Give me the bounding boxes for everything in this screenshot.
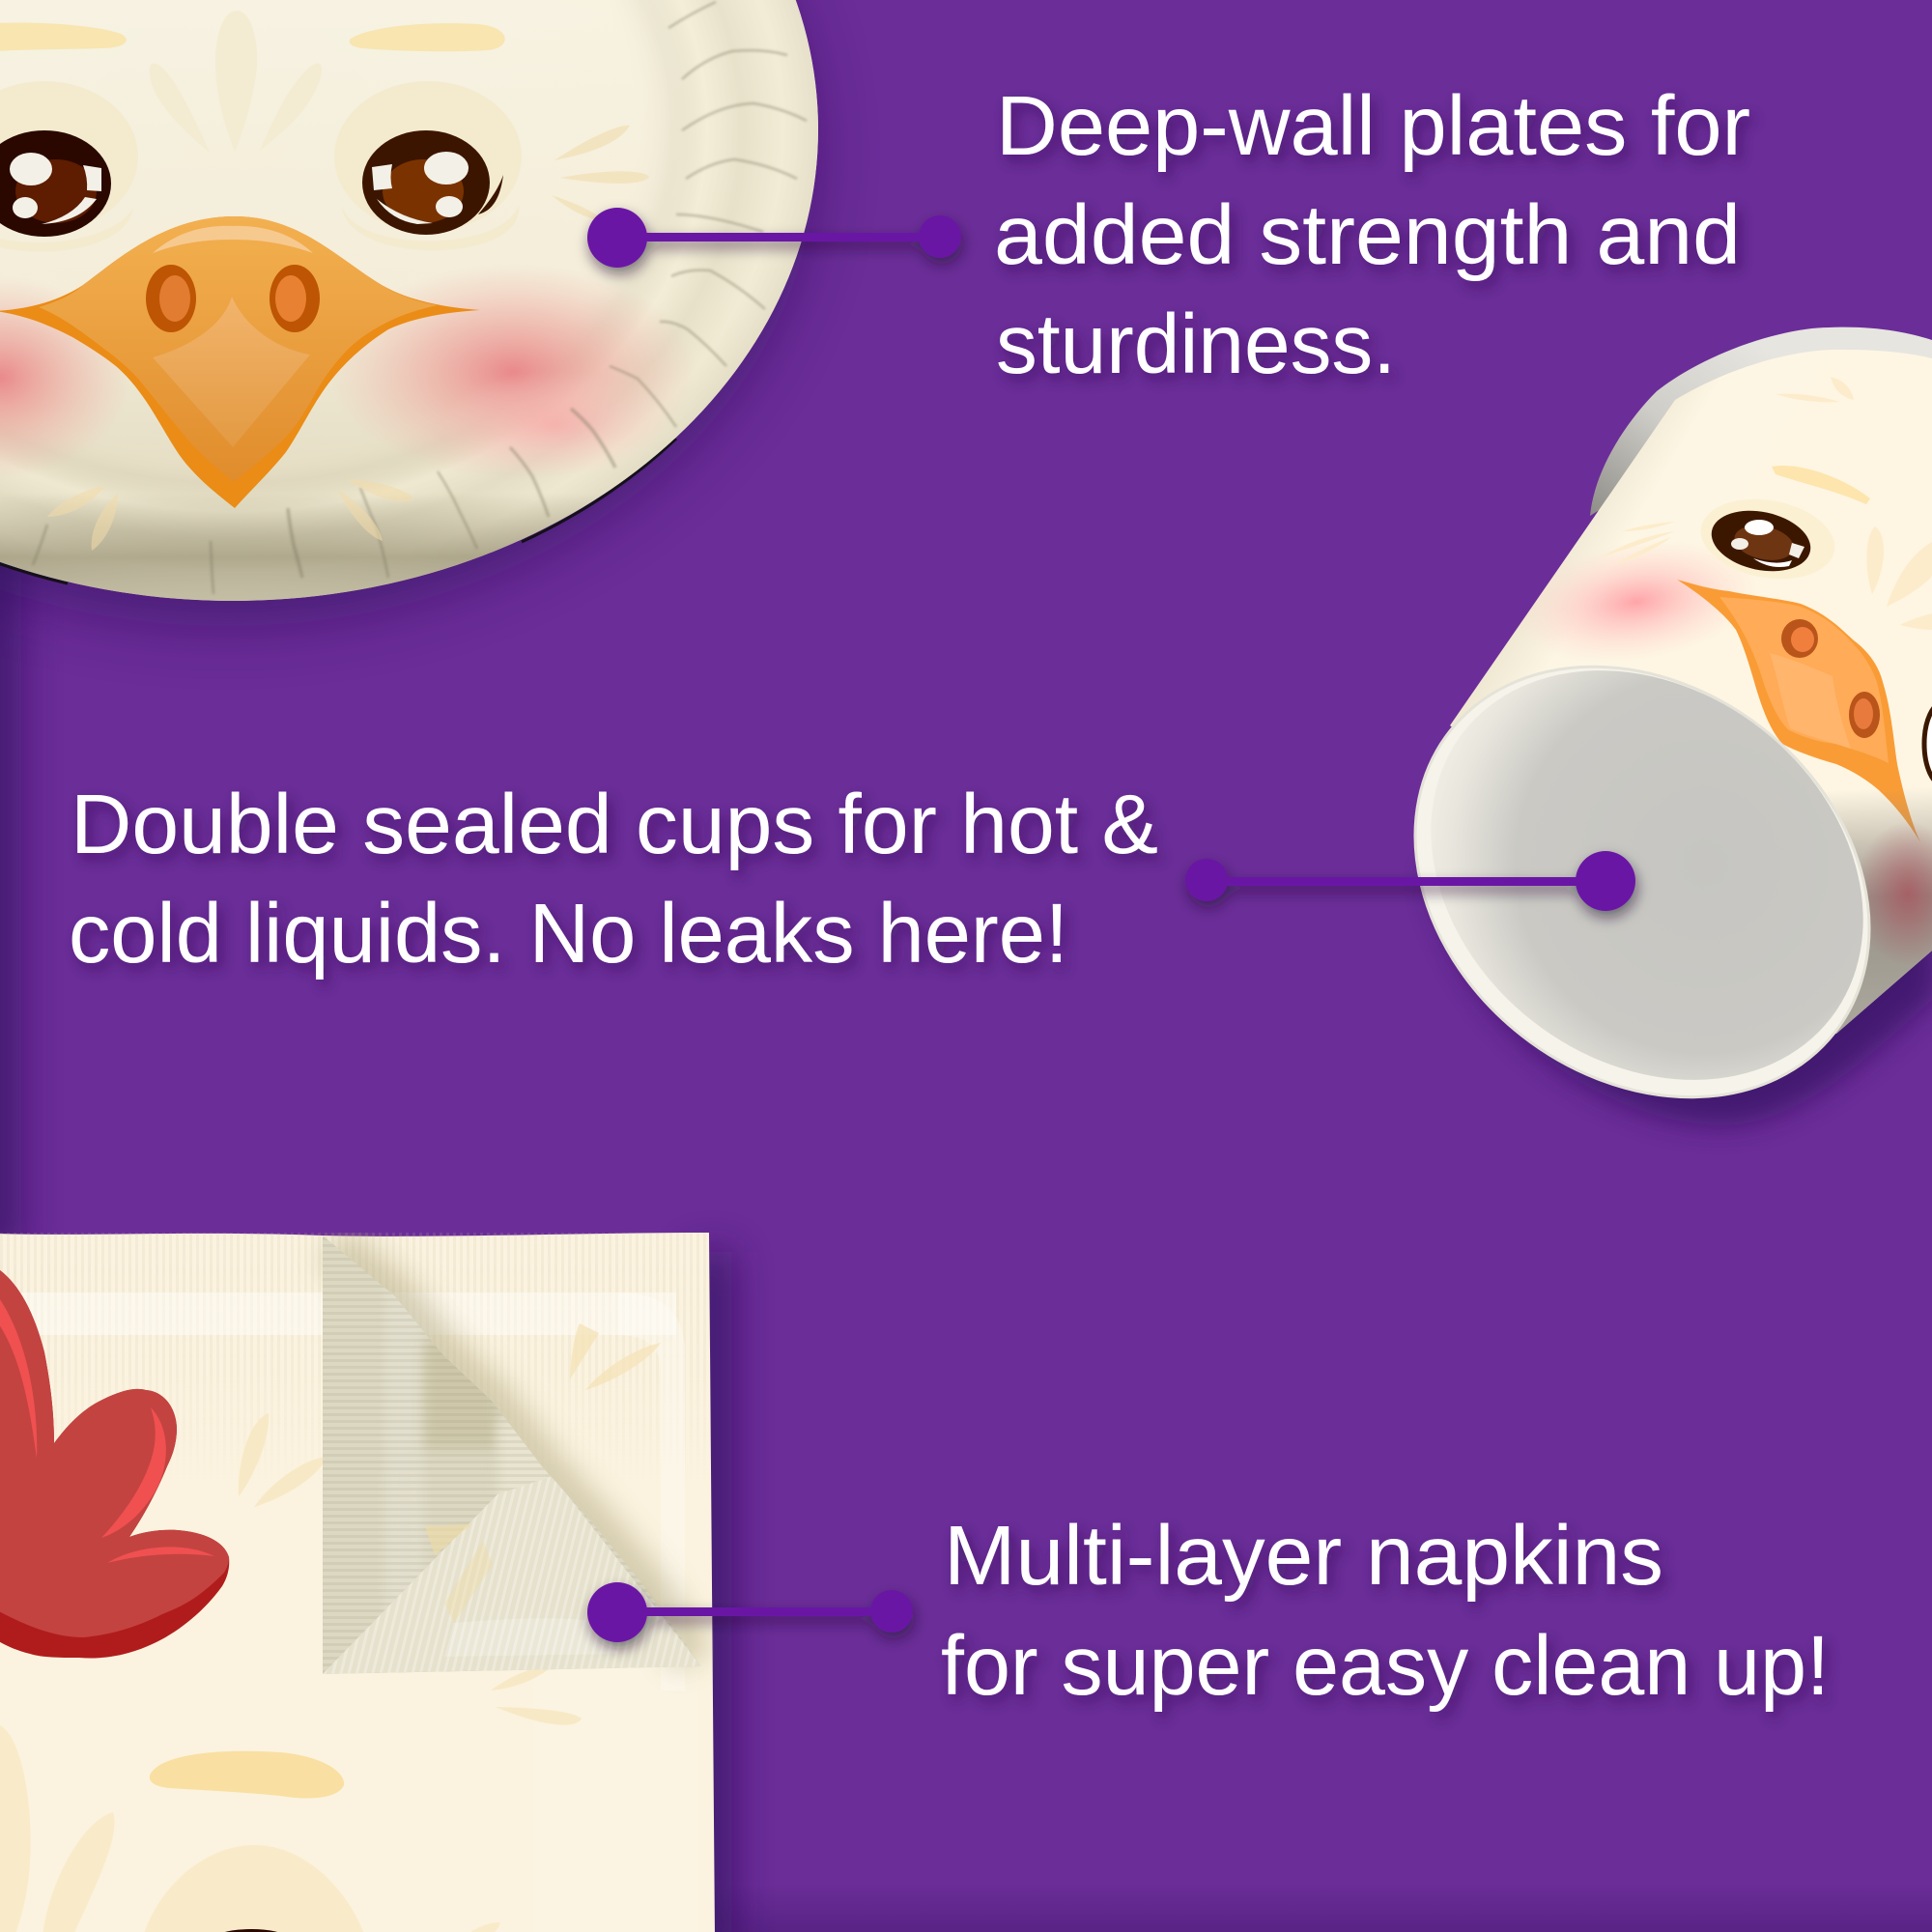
- fold lighter strip: [384, 1285, 424, 1671]
- text: plates: Deep-wall plates for: [996, 79, 1750, 173]
- text: napkins: [941, 1509, 1830, 1713]
- text: plates: added strength and: [994, 188, 1741, 282]
- napkin sheet: [0, 1233, 715, 1932]
- text: napkins: for super easy clean up!: [941, 1619, 1830, 1713]
- text: cups: cold liquids. No leaks here!: [69, 887, 1068, 980]
- fold darker patch: [424, 1342, 497, 1448]
- cup body: [1450, 350, 1932, 1034]
- text: plates: sturdiness.: [996, 298, 1396, 391]
- folded corner: [323, 1236, 704, 1675]
- cup eyebrow: [1772, 466, 1870, 504]
- nostrils: [146, 265, 320, 332]
- left eye: [0, 81, 138, 252]
- flap feathers: [570, 1323, 661, 1390]
- text: plates: [994, 79, 1750, 391]
- cup lip: [1590, 327, 1932, 516]
- napkin feathers: [239, 1413, 582, 1725]
- fold ribbed lower layer: [323, 1476, 701, 1674]
- rim folds: [33, 2, 807, 594]
- napkin margin band: [618, 1293, 685, 1690]
- napkin shadow: [692, 1252, 732, 1932]
- whisker feathers: [47, 126, 649, 551]
- cup beak: [1677, 580, 1920, 842]
- callout: cup pointer: [1185, 851, 1635, 911]
- cup lower shade: [1787, 734, 1932, 1043]
- cup nostrils: [1781, 619, 1880, 738]
- fold ghost feathers: [425, 1524, 471, 1555]
- beak: [0, 216, 480, 508]
- crest: [0, 1270, 229, 1658]
- text: napkins: Multi-layer napkins: [944, 1509, 1663, 1603]
- cup whiskers and feathers: [1601, 377, 1932, 630]
- eye top: [217, 1929, 285, 1932]
- plate shadow: [0, 0, 816, 626]
- text: cups: Double sealed cups for hot &: [71, 778, 1158, 871]
- cup eye: [1694, 489, 1841, 589]
- cheeks: [0, 264, 696, 480]
- cup base: [1329, 578, 1932, 1186]
- callout: napkin pointer: [587, 1582, 913, 1642]
- plate dark edge: [0, 439, 676, 583]
- forehead feathers: [150, 11, 322, 153]
- callout: plate pointer: [587, 208, 961, 268]
- plate body: [0, 0, 840, 618]
- cup shadow: [1430, 869, 1932, 1125]
- fold pale patch: [497, 1420, 555, 1497]
- cup blush: [1504, 526, 1769, 678]
- text: cups: [69, 778, 1158, 980]
- cup second eye: [1924, 702, 1932, 785]
- napkin eyebrow: [150, 1751, 344, 1798]
- cup with bird face: [1414, 327, 1932, 1136]
- right eye: [334, 81, 522, 250]
- napkin lower feathers: [0, 1725, 500, 1932]
- plate with bird face: [0, 0, 840, 626]
- eyebrows: [0, 22, 505, 51]
- napkin: [0, 1233, 732, 1932]
- flap shadow: [333, 1246, 696, 1660]
